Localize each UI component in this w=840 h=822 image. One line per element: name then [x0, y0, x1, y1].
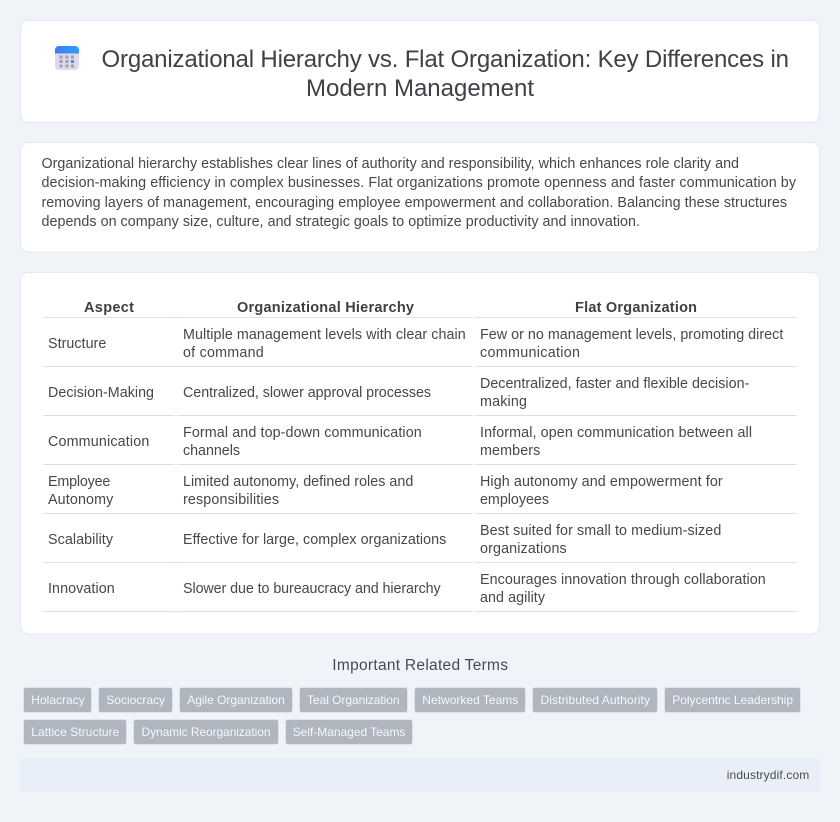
- row: communication: Informal, open communication between all: [480, 425, 752, 441]
- row: structure: Few or no management levels, promoting direct: [480, 327, 783, 343]
- row: innovation: Innovation: [48, 581, 115, 597]
- icon: calendar: [55, 46, 79, 70]
- panel: header card: [20, 20, 820, 122]
- row: scalability: organizations: [480, 541, 567, 557]
- row: decision-making: Decentralized, faster and flexible decision-: [480, 376, 750, 392]
- tags: related terms: Teal Organization: [307, 693, 400, 707]
- table header: [84, 300, 697, 316]
- row: employee autonomy: Limited autonomy, defined roles and: [183, 474, 413, 490]
- row: employee autonomy: Autonomy: [48, 492, 114, 508]
- footer: [20, 758, 820, 792]
- heading: important related terms: Important Related Terms: [332, 657, 508, 674]
- row: communication: Communication: [48, 434, 149, 450]
- tags: related terms: Polycentric Leadership: [672, 693, 793, 707]
- row: innovation: and agility: [480, 590, 546, 606]
- row: employee autonomy: Employee: [48, 474, 110, 490]
- row: communication: channels: [183, 443, 240, 459]
- row: scalability: Effective for large, complex organizations: [183, 532, 446, 548]
- text block: introduction paragraph: [42, 156, 797, 230]
- text block: introduction paragraph: removing layers of management, encouraging employee empowerment and collaboration. Balancing these structures: [42, 195, 787, 211]
- text block: introduction paragraph: decision-making efficiency in complex businesses. Flat organizations promote openness and faster communication by: [42, 175, 797, 191]
- title: Modern Management: [306, 75, 534, 102]
- title: [102, 46, 789, 102]
- row: decision-making: Centralized, slower approval processes: [183, 385, 431, 401]
- row: employee autonomy: responsibilities: [183, 492, 279, 508]
- text block: introduction paragraph: depends on company size, culture, and strategic goals to optimize productivity and innovation.: [42, 214, 640, 230]
- row: communication: members: [480, 443, 540, 459]
- row: employee autonomy: employees: [480, 492, 549, 508]
- tags: related terms: Networked Teams: [422, 693, 518, 707]
- row: innovation: [48, 572, 766, 606]
- panel: comparison table: [20, 272, 820, 634]
- tags: related terms: Self-Managed Teams: [293, 725, 405, 739]
- footer: industrydif.com: [727, 768, 809, 782]
- row: structure: Multiple management levels with clear chain: [183, 327, 466, 343]
- row: decision-making: Decision-Making: [48, 385, 154, 401]
- tags: related terms: [24, 688, 800, 744]
- row: communication: [48, 425, 752, 459]
- tags: related terms: Sociocracy: [106, 693, 165, 707]
- row: innovation: Slower due to bureaucracy and hierarchy: [183, 581, 442, 597]
- row: structure: communication: [480, 345, 580, 361]
- row: employee autonomy: [48, 474, 723, 508]
- row: scalability: [48, 523, 721, 557]
- row: structure: of command: [183, 345, 264, 361]
- row: structure: Structure: [48, 336, 106, 352]
- panel: introduction: [20, 142, 820, 252]
- row: decision-making: [48, 376, 750, 410]
- tags: related terms: Dynamic Reorganization: [142, 725, 270, 739]
- row: scalability: Best suited for small to medium-sized: [480, 523, 721, 539]
- tags: related terms: Distributed Authority: [540, 693, 650, 707]
- tags: related terms: Holacracy: [31, 693, 85, 707]
- row: decision-making: making: [480, 394, 527, 410]
- title: Organizational Hierarchy vs. Flat Organization: Key Differences in: [102, 46, 789, 73]
- row: innovation: Encourages innovation through collaboration: [480, 572, 766, 588]
- row: employee autonomy: High autonomy and empowerment for: [480, 474, 723, 490]
- tags: related terms: Agile Organization: [187, 693, 285, 707]
- text block: introduction paragraph: Organizational hierarchy establishes clear lines of authority and responsibility, which enhances role clarity and: [42, 156, 739, 172]
- row: scalability: Scalability: [48, 532, 114, 548]
- row: communication: Formal and top-down communication: [183, 425, 422, 441]
- table header: Organizational Hierarchy: [237, 300, 414, 316]
- table header: Flat Organization: [575, 300, 697, 316]
- row: structure: [48, 327, 783, 361]
- tags: related terms: Lattice Structure: [31, 725, 120, 739]
- table header: Aspect: [84, 300, 134, 316]
